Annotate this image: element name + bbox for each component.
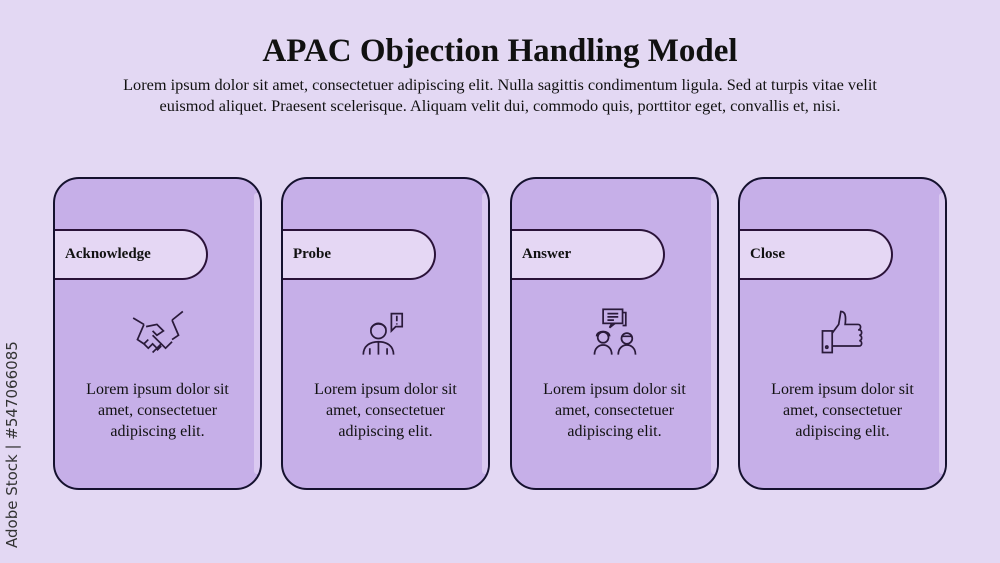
panel: Acknowledge — [53, 177, 262, 490]
icon: thumbs up — [822, 310, 862, 354]
body text: amet, consectetuer — [98, 402, 217, 419]
tab: Probe: Probe — [293, 246, 331, 262]
body text — [314, 381, 457, 440]
watermark: Adobe Stock | #547066085 — [3, 341, 21, 548]
panel: Close — [738, 177, 947, 490]
subtitle text: Lorem ipsum dolor sit amet, consectetuer adipiscing elit. Nulla sagittis condimentum ligula. Sed at turpis vitae velit euismod aliquet. Praesent scelerisque. Aliquam velit dui, commodo quis, porttitor eget, convallis et, nisi. — [123, 75, 877, 115]
body text: Lorem ipsum dolor sit — [86, 381, 229, 398]
tab: Answer: Answer — [522, 246, 571, 262]
tab: Close: Close — [750, 246, 785, 262]
body text — [86, 381, 229, 440]
tab: Close — [737, 229, 893, 280]
icon: conversation — [594, 308, 636, 355]
body text: Lorem ipsum dolor sit — [543, 381, 686, 398]
body text — [771, 381, 914, 440]
panel: Probe — [281, 177, 490, 490]
body text: adipiscing elit. — [567, 423, 662, 440]
body text: amet, consectetuer — [783, 402, 902, 419]
title: APAC Objection Handling Model — [262, 33, 738, 69]
tab: Probe — [280, 229, 436, 280]
tab: Answer — [509, 229, 665, 280]
tab: Acknowledge — [52, 229, 208, 280]
body text: Lorem ipsum dolor sit — [314, 381, 457, 398]
panel: Answer — [510, 177, 719, 490]
body text — [543, 381, 686, 440]
body text: amet, consectetuer — [326, 402, 445, 419]
icon: person with question — [362, 312, 404, 355]
body text: adipiscing elit. — [795, 423, 890, 440]
body text: Lorem ipsum dolor sit — [771, 381, 914, 398]
icon: handshake — [132, 310, 184, 354]
body text: amet, consectetuer — [555, 402, 674, 419]
body text: adipiscing elit. — [338, 423, 433, 440]
tab: Acknowledge: Acknowledge — [65, 246, 151, 262]
body text: adipiscing elit. — [110, 423, 205, 440]
